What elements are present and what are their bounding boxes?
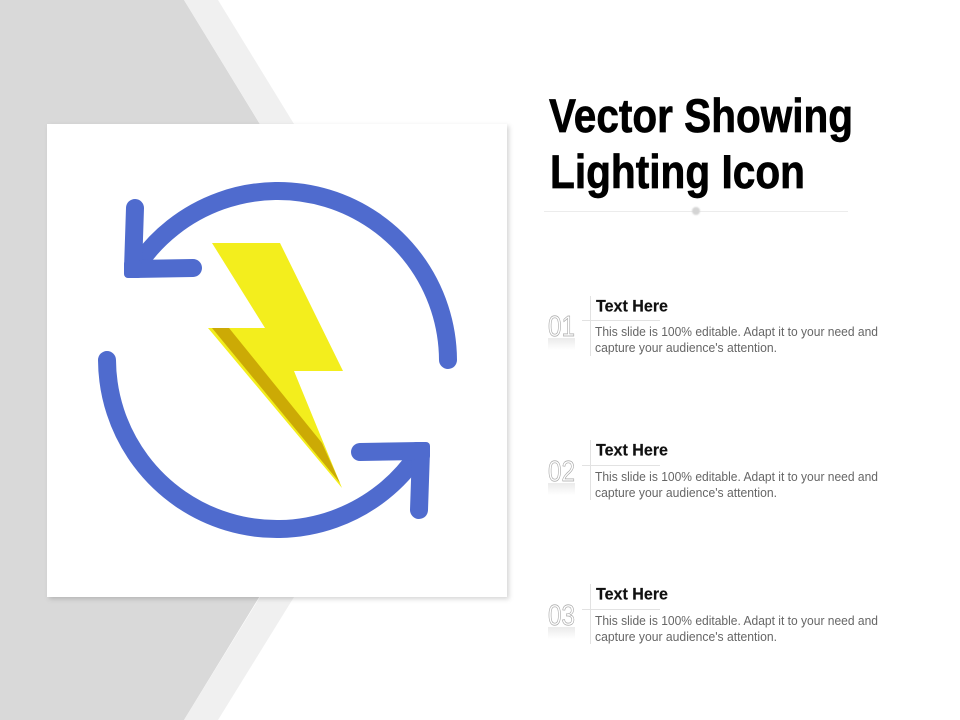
icon: circular arrow, top	[124, 191, 448, 360]
item heading: Text Here	[596, 298, 668, 316]
panel: icon card	[47, 124, 507, 597]
background: grey chevron shape	[0, 0, 294, 720]
item body: capture your audience's attention.	[595, 486, 777, 500]
title: Lighting Icon	[550, 145, 805, 198]
item body	[595, 325, 878, 355]
item body	[595, 470, 878, 500]
item body	[595, 614, 878, 644]
number 03: 03	[548, 600, 575, 632]
title	[549, 89, 853, 198]
title divider with dot	[544, 207, 848, 215]
title: Vector Showing	[549, 89, 853, 142]
item 02	[548, 440, 878, 500]
item 03	[548, 584, 878, 644]
item heading: Text Here	[596, 586, 668, 604]
item 01	[548, 296, 878, 356]
item body: This slide is 100% editable. Adapt it to your need and	[595, 325, 878, 339]
item body: This slide is 100% editable. Adapt it to your need and	[595, 614, 878, 628]
item body: capture your audience's attention.	[595, 630, 777, 644]
icon: circular arrow, bottom	[107, 360, 430, 529]
icon: lightning bolt	[208, 243, 343, 488]
number 02: 02	[548, 456, 575, 488]
number 01: 01	[548, 311, 575, 343]
item body: This slide is 100% editable. Adapt it to your need and	[595, 470, 878, 484]
item heading: Text Here	[596, 442, 668, 460]
item body: capture your audience's attention.	[595, 341, 777, 355]
